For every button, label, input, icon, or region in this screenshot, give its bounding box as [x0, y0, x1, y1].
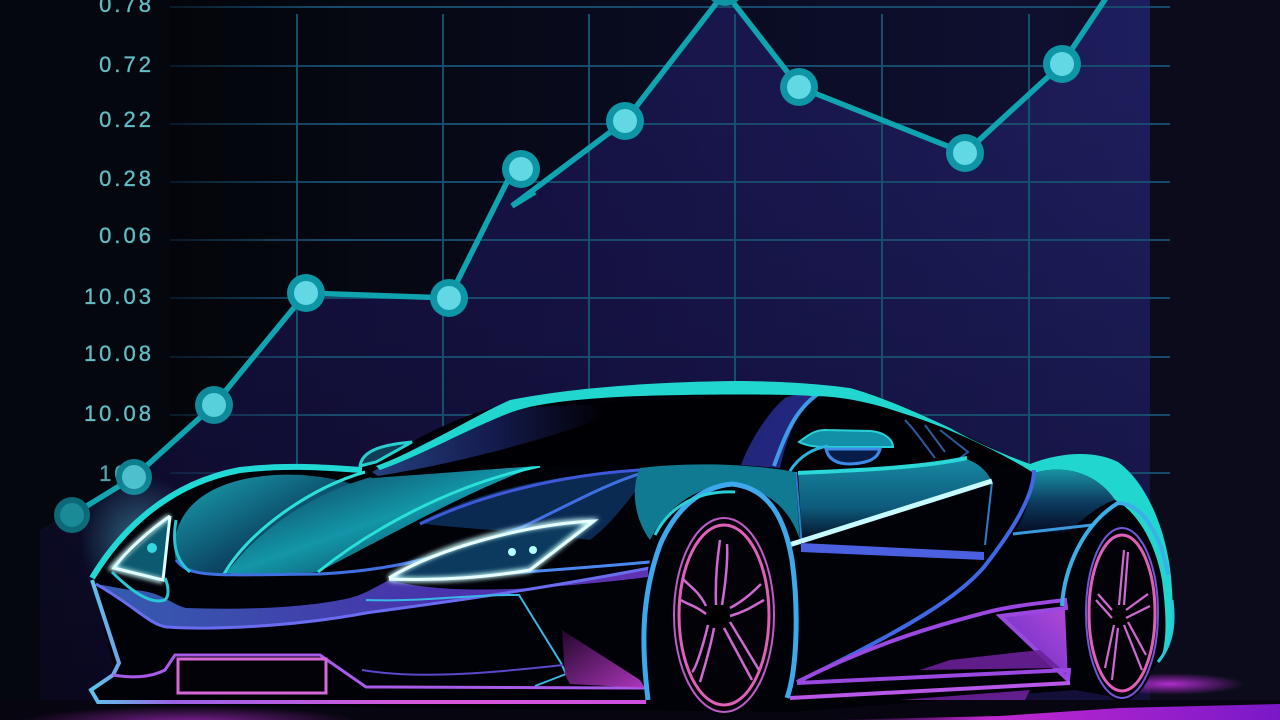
- rear tail line: [1158, 600, 1173, 662]
- front grille: [178, 659, 326, 693]
- right headlight: [389, 521, 594, 580]
- left hood panel: [175, 475, 358, 574]
- front lower band: [96, 567, 657, 628]
- middle hood panel: [226, 465, 540, 574]
- door upper bright line: [798, 458, 967, 473]
- rear wheel: [1082, 525, 1162, 701]
- front wheel: [670, 515, 778, 715]
- rear window slats: [905, 420, 968, 458]
- data points: [54, 0, 1081, 533]
- hood lines: [175, 466, 660, 575]
- rear wheel arch outline: [1062, 503, 1168, 606]
- y-axis labels: 0.22: [99, 107, 154, 132]
- floor glow: [0, 673, 1280, 720]
- y-axis labels: [84, 0, 154, 486]
- door mirror: [790, 430, 893, 471]
- car: [80, 381, 1173, 715]
- y-axis labels: 10.08: [84, 401, 154, 426]
- y-axis labels: 10.0: [99, 461, 154, 486]
- y-axis labels: 10.08: [84, 341, 154, 366]
- left headlight: [112, 516, 170, 601]
- purple rear vent: [1000, 610, 1068, 680]
- door lower panel edge: [796, 472, 992, 548]
- line series: [72, 0, 1110, 515]
- front fender top: [635, 464, 800, 540]
- car body silhouette: [90, 382, 1172, 712]
- side mirror front: [360, 442, 412, 466]
- y-axis labels: 0.72: [99, 52, 154, 77]
- y-axis labels: 0.28: [99, 166, 154, 191]
- rear fender panel: [1014, 470, 1115, 534]
- windshield: [366, 392, 790, 478]
- y-axis labels: 10.03: [84, 284, 154, 309]
- fender cyan outline: [92, 467, 362, 578]
- rear haunch line: [1013, 525, 1092, 534]
- side window: [790, 396, 1030, 470]
- door lower blue band: [801, 543, 984, 560]
- front vent: [562, 630, 645, 688]
- front lower outlines: [91, 562, 660, 702]
- y-axis labels: 0.06: [99, 223, 154, 248]
- a-pillar lines: [774, 394, 818, 466]
- front wheel arch: [648, 485, 798, 700]
- windshield tint: [372, 402, 645, 476]
- roof: [376, 381, 1173, 662]
- side sweep panel: [418, 470, 650, 540]
- front wheel arch outline: [644, 484, 796, 700]
- window frame: [741, 395, 812, 468]
- headlight glow: [80, 475, 200, 605]
- door white stripe: [789, 481, 992, 545]
- chart gridlines: [170, 7, 1170, 480]
- door panel: [798, 459, 992, 540]
- side sill lines: [790, 600, 1070, 700]
- rear diagonal line: [797, 470, 1034, 682]
